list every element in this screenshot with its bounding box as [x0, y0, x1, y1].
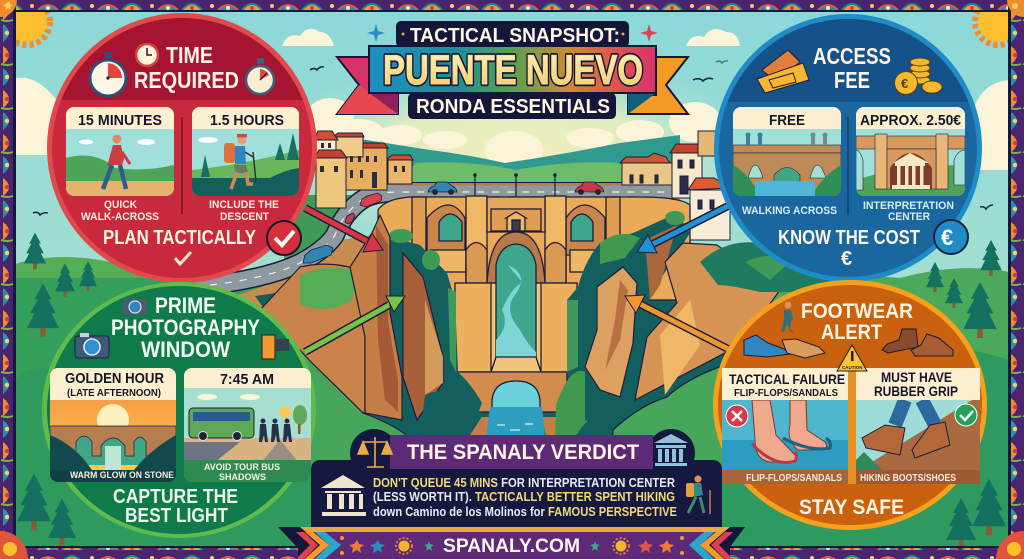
icon: stopwatch small [246, 58, 274, 94]
icon: small euro: € [841, 248, 852, 270]
heading: time required: REQUIRED [134, 67, 239, 93]
card: golden hour [50, 368, 176, 482]
heading: access fee: ACCESS [813, 43, 891, 69]
footer url: SPANALY.COM [443, 536, 580, 557]
icon: walking person [781, 302, 794, 332]
verdict heading [390, 435, 653, 469]
text: capture the best light: BEST LIGHT [125, 505, 228, 527]
caption: include the descent: DESCENT [220, 211, 269, 223]
icon: green check [955, 404, 977, 426]
clouds [16, 29, 1009, 170]
chevrons left [278, 527, 341, 559]
footer band [278, 527, 745, 559]
icon: film roll [262, 335, 289, 359]
card: must have rubber grip: HIKING BOOTS/SHOES [860, 473, 956, 484]
card: must have rubber grip: MUST HAVE [881, 369, 952, 385]
caption: walking across: WALKING ACROSS [742, 205, 837, 217]
heading: footwear alert: ALERT [821, 321, 882, 344]
card: 1.5 hours: 1.5 HOURS [210, 112, 284, 129]
caption: quick walk-across: QUICK [104, 199, 137, 211]
heading: prime photography window: PHOTOGRAPHY [111, 315, 260, 340]
icon: temple [321, 475, 366, 516]
heading: access fee [813, 43, 891, 93]
ribbon tail left [337, 57, 398, 114]
icon: camera top [123, 299, 147, 315]
text: stay safe: STAY SAFE [799, 496, 904, 519]
road [180, 173, 680, 288]
text: plan tactically: PLAN TACTICALLY [103, 227, 257, 249]
caption: interpretation center: INTERPRETATION [863, 200, 954, 212]
icon: caution sign [837, 345, 867, 371]
distant mountains and valley [360, 135, 680, 200]
icon: euro badge: € [941, 225, 953, 250]
birds [33, 61, 993, 215]
corner ornament top left [0, 0, 17, 17]
icon: red check badge [267, 221, 301, 255]
icon: hiker [224, 134, 256, 189]
divider post [848, 368, 856, 484]
heading: prime photography window: PRIME [155, 293, 216, 318]
panel: prime photography window [42, 282, 316, 538]
subtitle plate: tactical snapshot: TACTICAL SNAPSHOT: [410, 25, 620, 47]
card: must have rubber grip: RUBBER GRIP [874, 383, 958, 399]
icon: hiker [686, 476, 710, 514]
icon: clock [136, 44, 158, 66]
verdict body text: (LESS WORTH IT). TACTICALLY BETTER SPENT HIKING [373, 490, 675, 504]
card: 7:45 am: SHADOWS [219, 472, 266, 483]
arrow: fee to bridge [637, 205, 730, 253]
icon: tickets [757, 50, 809, 93]
main banner: puente nuevo: PUENTE NUEVO [383, 46, 643, 93]
town left [314, 131, 413, 208]
panel: access fee [705, 10, 995, 282]
text: capture the best light [113, 486, 238, 527]
heading: prime photography window [111, 293, 260, 362]
icon: coins: € [901, 76, 908, 91]
card: free [733, 107, 841, 196]
icon: shoes left [744, 335, 825, 358]
card: 15 minutes: 15 MINUTES [78, 112, 162, 129]
stars [367, 24, 658, 42]
card: 7:45 am: 7:45 AM [220, 371, 274, 388]
corner ornament bottom left [0, 531, 28, 559]
verdict body text [373, 476, 677, 519]
heading: time required: TIME [166, 42, 213, 68]
icon: small check [175, 252, 191, 264]
card: approx 2.50 [856, 107, 965, 196]
sun top left [5, 0, 49, 44]
caption: quick walk-across: WALK-ACROSS [81, 211, 159, 223]
card: 7:45 am [184, 368, 311, 483]
icon: museum [654, 434, 688, 466]
text: know the cost: KNOW THE COST [778, 227, 920, 249]
caption: interpretation center: CENTER [888, 211, 930, 223]
title block [337, 21, 688, 119]
heading: footwear alert: FOOTWEAR [801, 300, 913, 323]
text: capture the best light: CAPTURE THE [113, 486, 238, 508]
caption: include the descent [209, 199, 279, 223]
icon: walker [103, 134, 130, 189]
verdict body text: DON'T QUEUE 45 MINS FOR INTERPRETATION CENTER [373, 476, 675, 490]
panel: the spanaly verdict [311, 429, 722, 527]
town right [620, 131, 730, 240]
verdict plate [311, 460, 722, 527]
arrow: footwear to bridge [625, 295, 730, 350]
card: 1.5 hours [192, 107, 299, 196]
card: 15 minutes [66, 107, 174, 196]
icon: coins [894, 58, 942, 94]
subtitle plate: ronda essentials: RONDA ESSENTIALS [416, 96, 610, 118]
icon: scales [358, 437, 392, 467]
icon: boots right [882, 329, 953, 356]
footer decorations [340, 536, 684, 555]
verdict body text: down Camino de los Molinos for FAMOUS PERSPECTIVE [373, 505, 677, 519]
slopes around road [215, 195, 372, 340]
icon: camera left [75, 333, 109, 358]
icon: stopwatch large [90, 52, 126, 96]
cars [303, 182, 604, 263]
card: tactical failure [722, 368, 848, 484]
caption: quick walk-across [81, 199, 159, 223]
foreground green slopes [300, 350, 740, 470]
arrow: photography to bridge [305, 296, 405, 352]
icon: red cross [726, 405, 748, 427]
icon backing circles [350, 429, 695, 477]
caption: include the descent: INCLUDE THE [209, 199, 279, 211]
heading: footwear alert [801, 300, 913, 344]
verdict heading: THE SPANALY VERDICT [407, 441, 639, 464]
card: golden hour: (LATE AFTERNOON) [67, 387, 161, 399]
panel: footwear alert [713, 280, 987, 530]
heading: prime photography window: WINDOW [141, 337, 230, 362]
chevrons right [689, 527, 745, 559]
sun top right [976, 0, 1020, 44]
bridge: Puente Nuevo [378, 196, 690, 436]
card: tactical failure: FLIP-FLOPS/SANDALS [746, 473, 842, 484]
canyon cliffs [260, 211, 830, 433]
card: 7:45 am: AVOID TOUR BUS [204, 462, 280, 473]
heading: time required [134, 42, 239, 93]
card: tactical failure: TACTICAL FAILURE [729, 371, 845, 387]
caption: interpretation center [863, 200, 954, 223]
card: must have rubber grip [856, 368, 980, 484]
sky background [0, 0, 1024, 300]
icon: caution sign: CAUTION [842, 365, 862, 370]
icon: euro badge [934, 220, 968, 254]
corner ornament top right [1007, 0, 1024, 17]
pine trees [17, 233, 1006, 548]
card: tactical failure: FLIP-FLOPS/SANDALS [734, 387, 838, 399]
ribbon tail right [628, 57, 688, 114]
card: free: FREE [769, 112, 805, 129]
card: golden hour: WARM GLOW ON STONE [70, 470, 174, 480]
arrow: time to bridge [305, 208, 383, 252]
green hills [15, 257, 1009, 559]
main banner: puente nuevo: PUENTE NUEVO [383, 46, 643, 93]
card: approx 2.50: APPROX. 2.50€ [860, 112, 962, 129]
divider [847, 117, 849, 215]
card: golden hour: GOLDEN HOUR [65, 370, 164, 387]
panel: time required [40, 10, 330, 283]
corner ornament bottom right [996, 531, 1024, 559]
heading: access fee: FEE [834, 67, 870, 93]
divider [181, 117, 183, 214]
